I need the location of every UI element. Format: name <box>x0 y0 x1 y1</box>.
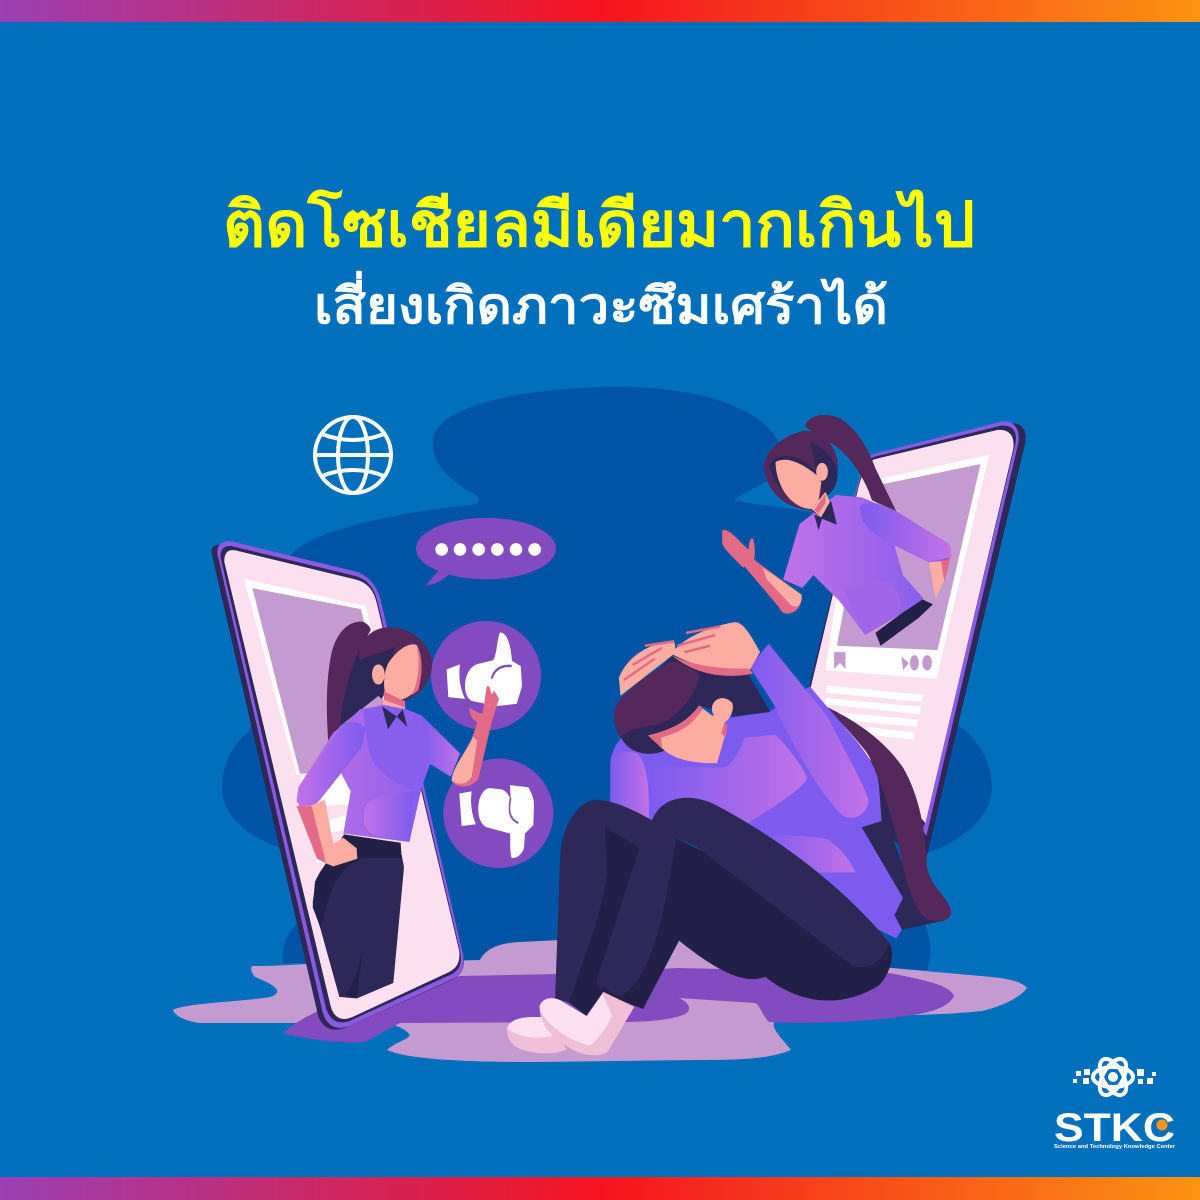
photo frame <box>825 455 989 679</box>
left arm <box>297 800 357 866</box>
photo <box>837 464 980 650</box>
right arm <box>929 554 952 599</box>
ponytail <box>805 415 896 511</box>
face <box>384 644 421 700</box>
right phone <box>808 421 1026 855</box>
speech bubble <box>416 518 556 585</box>
neck and collar <box>812 496 837 530</box>
left woman <box>297 622 499 999</box>
top gradient bar <box>0 0 1200 22</box>
ear <box>372 664 385 685</box>
front leg dark <box>600 838 892 1009</box>
post text lines <box>824 685 924 740</box>
ear <box>816 463 828 481</box>
nucleus <box>1108 1072 1118 1082</box>
hand <box>722 530 755 568</box>
hair <box>359 627 432 701</box>
raised sleeve <box>750 644 869 818</box>
head <box>614 656 770 763</box>
atom icon <box>1093 1055 1133 1099</box>
left phone <box>212 541 464 1030</box>
front leg light <box>596 798 889 996</box>
title <box>223 188 975 334</box>
dark background blob <box>222 387 992 970</box>
bottom gradient bar <box>0 1177 1200 1200</box>
torso <box>783 495 951 635</box>
upper-right woman <box>722 415 952 646</box>
photo frame <box>244 579 388 775</box>
belt <box>333 834 402 858</box>
thumbs-up badge <box>431 621 541 730</box>
shoulder highlight <box>610 751 649 821</box>
post icons <box>834 652 932 671</box>
torso <box>297 705 460 842</box>
ear <box>712 698 733 723</box>
ponytail <box>327 622 371 743</box>
hands on head <box>619 622 760 696</box>
pants <box>313 840 404 999</box>
left scene <box>212 541 499 1030</box>
hair <box>763 431 838 510</box>
lower highlight <box>762 835 855 873</box>
neck <box>383 691 405 714</box>
icon: globe <box>315 417 391 493</box>
face <box>776 460 821 509</box>
face <box>648 706 726 763</box>
photo <box>252 588 385 774</box>
long hair of seated figure <box>824 706 951 921</box>
heading line 1: ติดโซเชียลมีเดียมากเกินไป <box>223 188 975 260</box>
belt <box>875 599 933 646</box>
back shadow <box>844 806 944 930</box>
pixel squares <box>1073 1069 1156 1084</box>
shoes <box>507 992 634 1055</box>
right scene <box>507 415 1026 1055</box>
ground puddle dark <box>283 968 954 1042</box>
collar <box>382 706 407 729</box>
reaching arm <box>743 559 802 614</box>
back leg <box>555 800 653 1015</box>
orange dot <box>1156 1120 1168 1130</box>
thumbs-down badge <box>443 759 553 868</box>
right arm <box>452 686 499 787</box>
logo tagline: Science and Technology Knowledge Center <box>1054 1144 1176 1150</box>
ground puddle light <box>173 940 1027 1062</box>
heading line 2: เสี่ยงเกิดภาวะซึมเศร้าได้ <box>314 271 888 334</box>
chest highlight <box>652 735 807 824</box>
typing dots <box>435 543 541 556</box>
STKC logo <box>1054 1055 1176 1150</box>
caption lines <box>300 772 353 863</box>
seated figure <box>507 622 903 1055</box>
logo wordmark: STKC <box>1054 1106 1175 1150</box>
sweater body <box>610 686 903 938</box>
